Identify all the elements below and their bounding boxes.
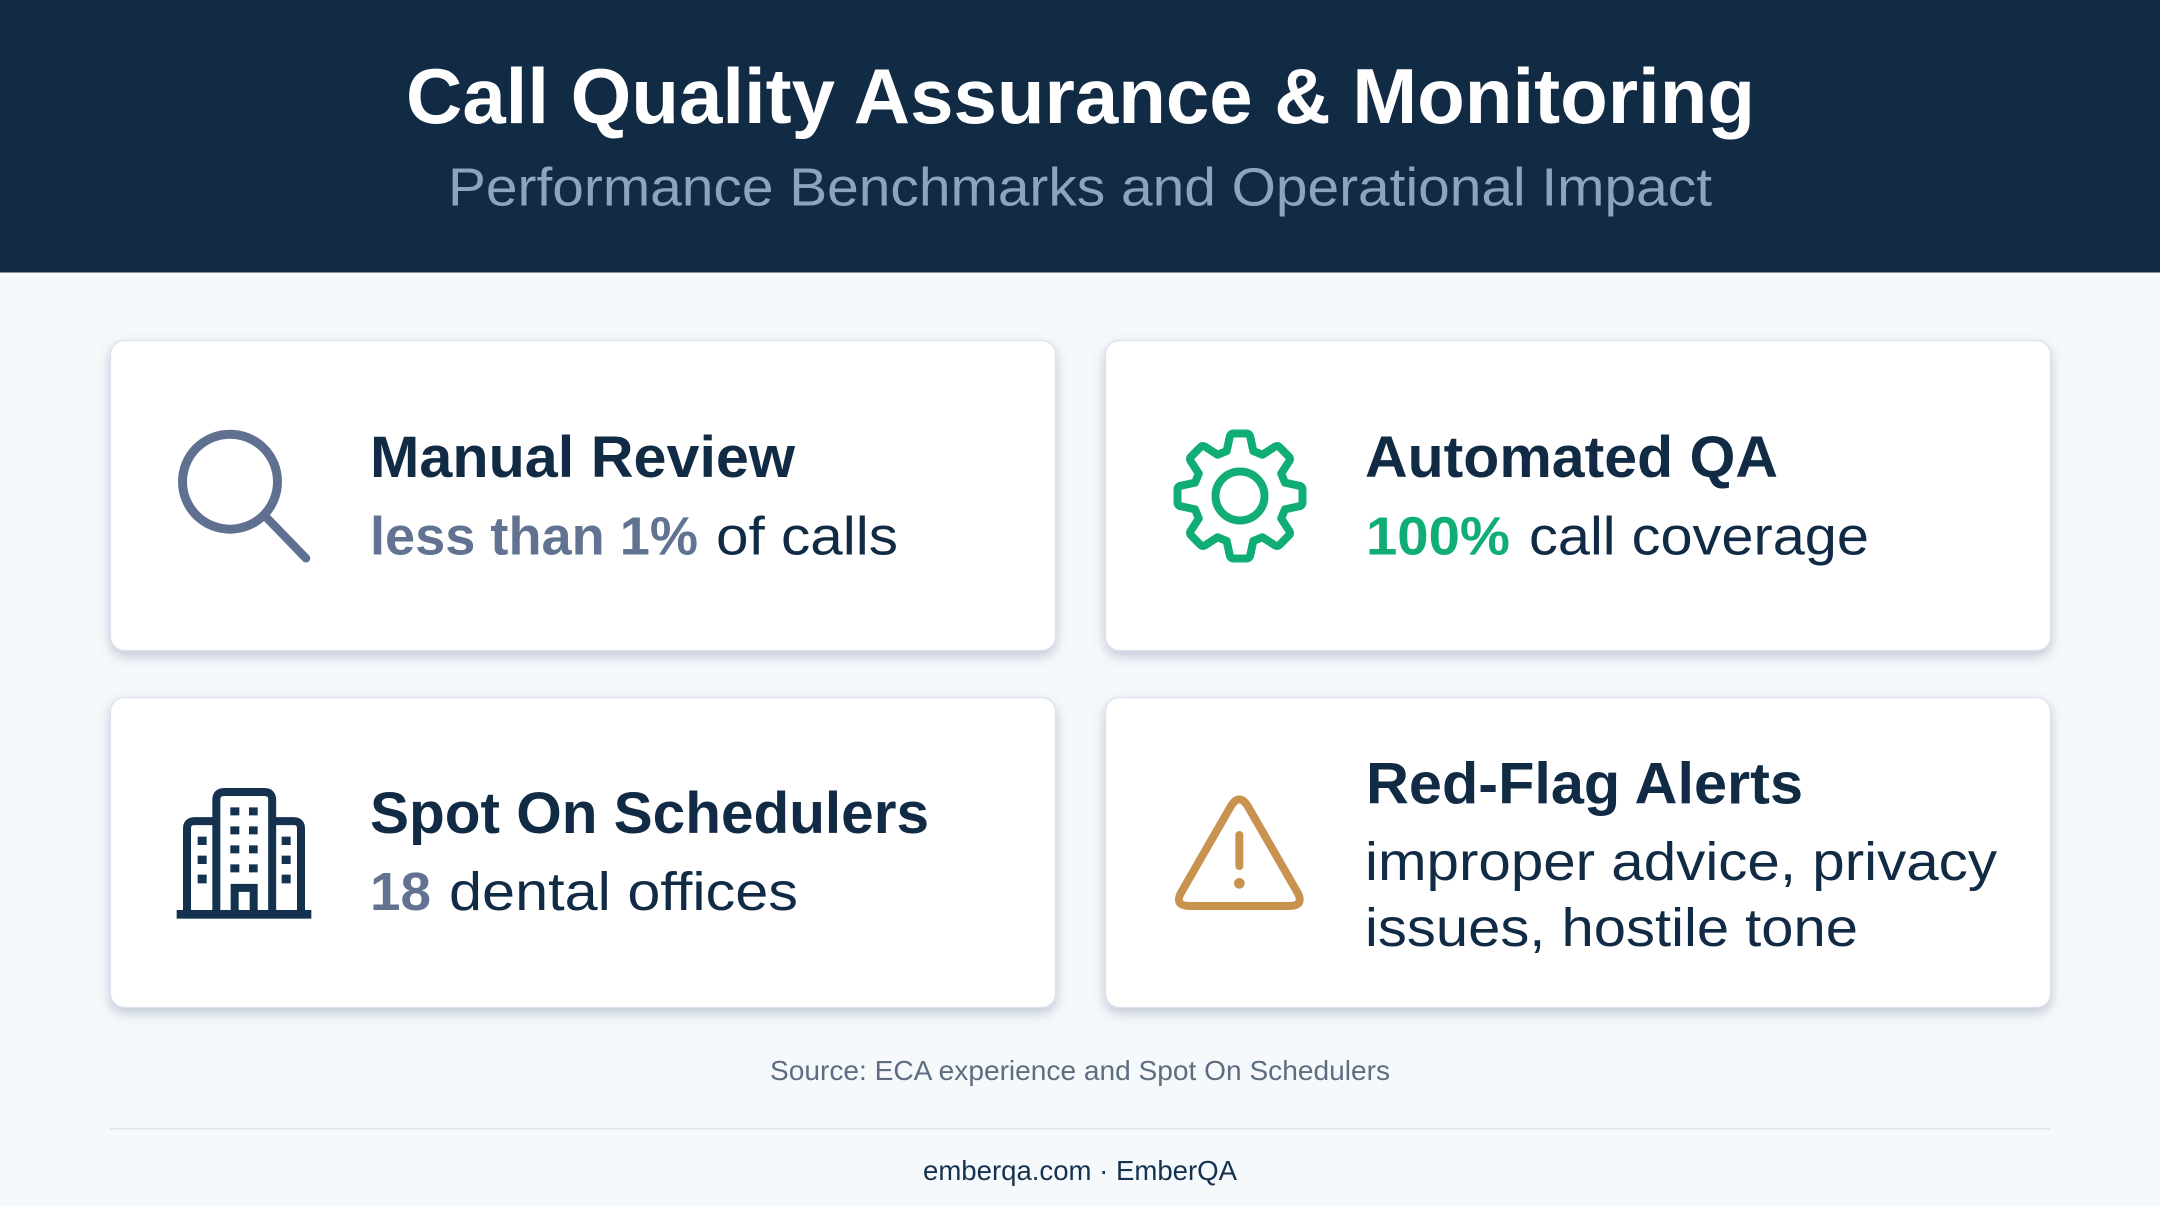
heading: manual review: Manual Review — [370, 425, 795, 490]
panel: automated QA — [1106, 340, 2050, 650]
icon: warning triangle — [1179, 799, 1300, 906]
source note: Source: ECA experience and Spot On Schedulers — [770, 1055, 1390, 1086]
header band — [0, 0, 2160, 272]
heading: spot on schedulers: Spot On Schedulers — [370, 781, 929, 846]
subtitle: Performance Benchmarks and Operational Impact — [448, 158, 1712, 218]
stat: less than 1% of calls: of calls — [716, 506, 898, 566]
heading: red-flag alerts: Red-Flag Alerts — [1366, 752, 1803, 816]
title: Call Quality Assurance & Monitoring — [406, 52, 1755, 140]
description: alert triggers — [1365, 832, 1997, 958]
icon: office building — [177, 792, 311, 919]
stat: 100% call coverage — [1366, 506, 1869, 566]
panel: red-flag alerts — [1106, 698, 2050, 1008]
stat: 100% call coverage: call coverage — [1529, 506, 1869, 566]
stat: 100% call coverage: 100% — [1366, 506, 1510, 566]
icon: magnifying glass — [182, 434, 306, 558]
stat: 18 dental offices: dental offices — [449, 862, 798, 922]
description: alert triggers: issues, hostile tone — [1365, 898, 1858, 958]
panel: spot on schedulers — [110, 698, 1056, 1008]
stat: less than 1% of calls — [370, 506, 898, 566]
panel: manual review — [110, 340, 1056, 650]
description: alert triggers: improper advice, privacy — [1365, 832, 1997, 892]
icon: gear — [1178, 434, 1302, 558]
stat: 18 dental offices: 18 — [370, 862, 431, 922]
footer: emberqa.com · EmberQA — [923, 1155, 1237, 1186]
heading: automated QA: Automated QA — [1365, 425, 1778, 490]
stat: less than 1% of calls: less than 1% — [370, 506, 698, 566]
